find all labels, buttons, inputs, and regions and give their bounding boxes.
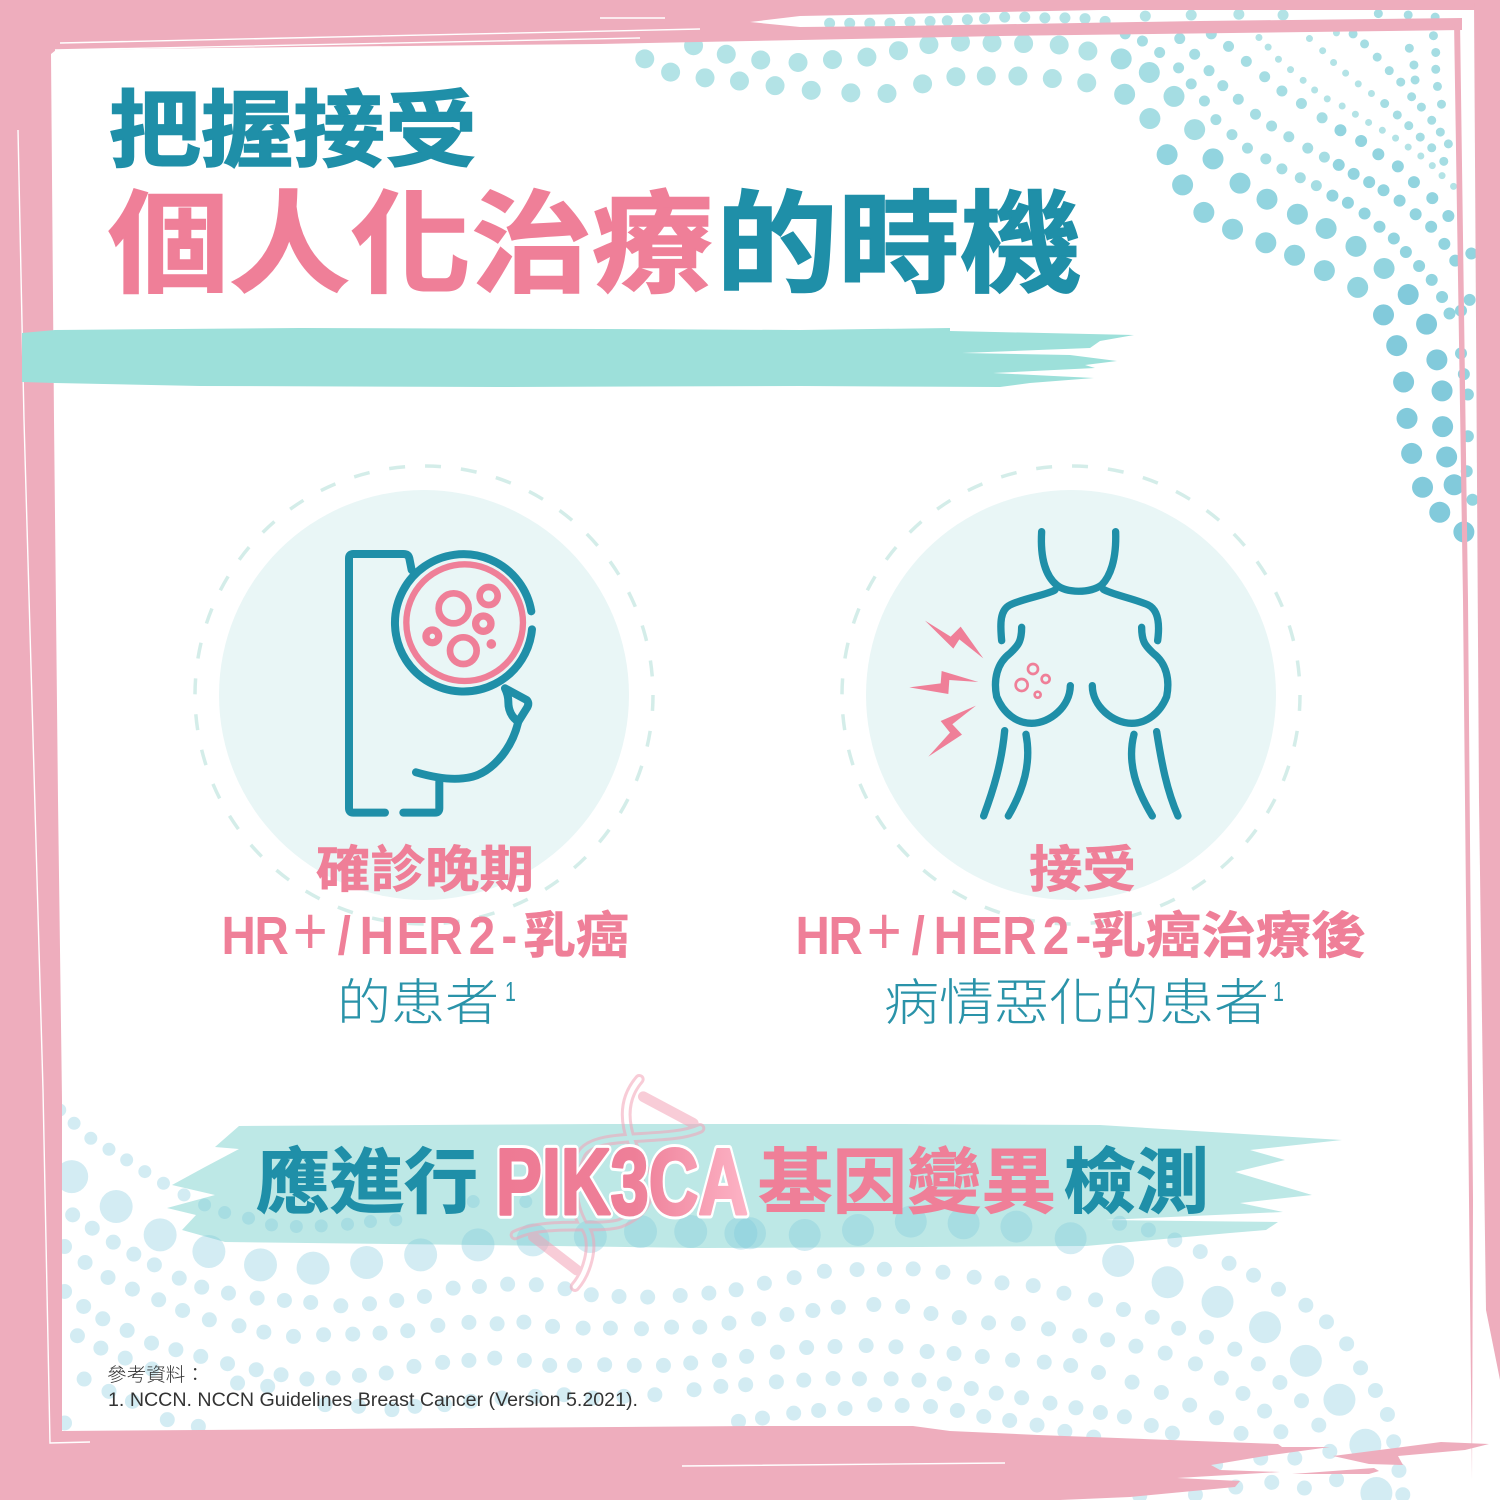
label: diagnosed advanced: 確診晚期 <box>316 842 534 898</box>
icon circle background <box>195 466 653 924</box>
callout: PIK3CA testing: 應進行 <box>256 1144 478 1223</box>
callout: PIK3CA testing: 基因變異 <box>758 1144 1056 1223</box>
dot pattern: bottom right <box>750 1222 1403 1496</box>
icon: DNA helix <box>515 1079 700 1287</box>
label: diagnosed advanced <box>222 842 629 1031</box>
dot pattern: bottom left <box>60 1110 747 1426</box>
references: 參考資料： <box>107 1364 205 1386</box>
callout: PIK3CA testing: PIK3CA <box>496 1129 748 1234</box>
label: after treatment: HR+/HER2- <box>796 892 1091 969</box>
label: diagnosed advanced: 的患者 <box>337 975 499 1031</box>
dot pattern: top right <box>619 14 1472 532</box>
label: after treatment: 1 <box>1273 977 1284 1008</box>
references: 1. NCCN. NCCN Guidelines Breast Cancer (Version 5.2021). <box>108 1390 638 1411</box>
title: 的時機 <box>716 183 1082 307</box>
label: diagnosed advanced: HR+/HER2- <box>222 892 517 969</box>
title: 把握接受 <box>109 84 477 178</box>
callout: PIK3CA testing: 檢測 <box>1063 1144 1209 1223</box>
title <box>108 84 1082 307</box>
label: after treatment <box>796 842 1366 1031</box>
brush stroke: under title <box>22 328 1134 387</box>
label: after treatment: 病情惡化的患者 <box>884 975 1269 1031</box>
label: after treatment: 乳癌治療後 <box>1091 908 1366 964</box>
label: diagnosed advanced: 1 <box>505 977 516 1008</box>
icon: torso with breast pain <box>909 532 1178 816</box>
label: diagnosed advanced: 乳癌 <box>523 908 629 964</box>
panel: newly diagnosed <box>195 466 653 1031</box>
brush stroke: bottom banner <box>167 1124 1342 1248</box>
callout: PIK3CA testing <box>256 1129 1209 1234</box>
label: after treatment: 接受 <box>1029 842 1136 898</box>
icon: breast with magnified cells <box>349 554 532 813</box>
panel: progression after treatment <box>796 466 1366 1031</box>
icon circle background <box>842 466 1300 924</box>
title: 個人化治療 <box>108 183 713 307</box>
callout: PIK3CA testing: PIK3CA <box>496 1129 748 1234</box>
references <box>107 1364 638 1411</box>
